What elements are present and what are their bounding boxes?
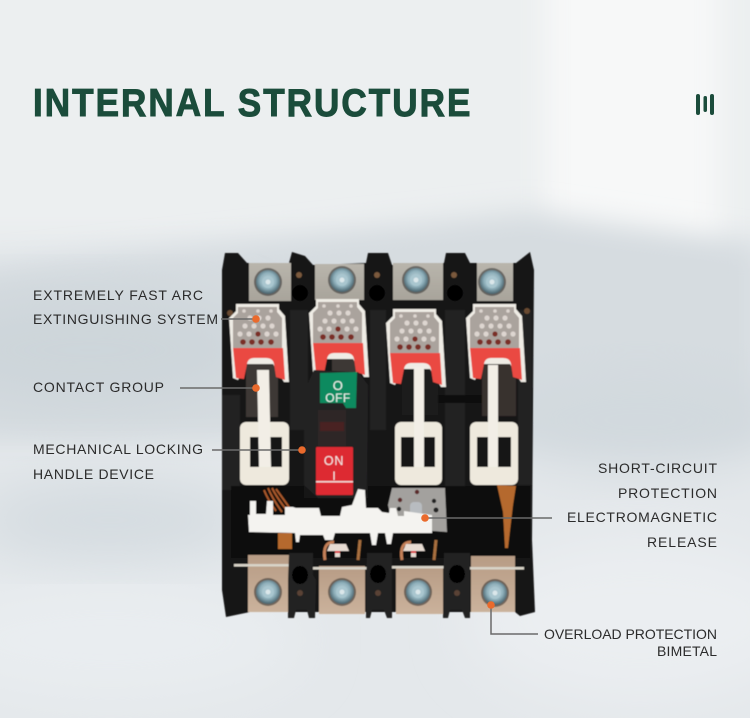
top terminal plates bbox=[249, 263, 513, 301]
arc chute pole 3 bbox=[386, 309, 446, 387]
mechanical locking handle bbox=[304, 370, 368, 498]
housing mid ribs bbox=[222, 310, 532, 490]
mechanical locking handle: OFF bbox=[325, 391, 351, 405]
callout: contact group bbox=[33, 379, 260, 395]
separator holes bbox=[227, 272, 530, 316]
small bimetal contacts bbox=[327, 544, 425, 557]
callout: short-circuit protection electromagnetic release bbox=[421, 460, 717, 550]
icon: three vertical bars bbox=[696, 94, 714, 115]
mechanical locking handle: I bbox=[332, 469, 336, 483]
callout: arc extinguishing system: EXTINGUISHING SYSTEM bbox=[33, 311, 218, 327]
callout: mechanical locking handle device: MECHANICAL LOCKING bbox=[33, 441, 203, 457]
mechanical locking handle: O bbox=[333, 378, 343, 393]
breaker housing bbox=[222, 252, 535, 617]
bottom separators bbox=[288, 553, 470, 618]
copper leads bbox=[278, 485, 516, 549]
callout: short-circuit protection electromagnetic release: ELECTROMAGNETIC bbox=[567, 509, 717, 525]
top bolts bbox=[254, 266, 506, 296]
title: INTERNAL STRUCTURE bbox=[33, 80, 470, 124]
white comb bar bbox=[248, 489, 432, 545]
callout: arc extinguishing system: EXTREMELY FAST ARC bbox=[33, 287, 203, 303]
callout: overload protection bimetal: OVERLOAD PROTECTION bbox=[544, 626, 717, 642]
rocker window bbox=[318, 410, 346, 446]
arc chute pole 1 bbox=[229, 304, 289, 382]
ON button bbox=[316, 447, 353, 495]
white contact blades bbox=[257, 365, 498, 467]
terminal braid loops bbox=[324, 540, 436, 560]
lower white moulded blocks bbox=[240, 422, 518, 485]
callout: mechanical locking handle device bbox=[33, 441, 306, 482]
circuit breaker product photo bbox=[222, 252, 535, 618]
separator openings bbox=[292, 565, 465, 596]
mechanical locking handle: ON bbox=[324, 454, 344, 468]
copper braids bbox=[264, 488, 291, 512]
arc chute pole 2 bbox=[309, 299, 369, 377]
lower compartment bbox=[231, 486, 530, 558]
callout: overload protection bimetal bbox=[487, 601, 717, 659]
bottom terminal plates bbox=[248, 555, 515, 614]
callout: arc extinguishing system bbox=[33, 287, 260, 327]
callout: short-circuit protection electromagnetic release: PROTECTION bbox=[618, 485, 717, 501]
arc chute pole 4 bbox=[466, 304, 526, 382]
electromagnetic release steel plate bbox=[388, 488, 447, 532]
dark contact gaps bbox=[246, 352, 516, 417]
metal strap bbox=[234, 564, 524, 570]
callout: contact group: CONTACT GROUP bbox=[33, 379, 164, 395]
callout: overload protection bimetal: BIMETAL bbox=[657, 643, 717, 659]
callout: short-circuit protection electromagnetic release: SHORT-CIRCUIT bbox=[598, 460, 717, 476]
bottom bolts bbox=[254, 578, 509, 607]
callout: short-circuit protection electromagnetic release: RELEASE bbox=[647, 534, 717, 550]
OFF button bbox=[320, 372, 357, 408]
callout: mechanical locking handle device: HANDLE DEVICE bbox=[33, 466, 154, 482]
